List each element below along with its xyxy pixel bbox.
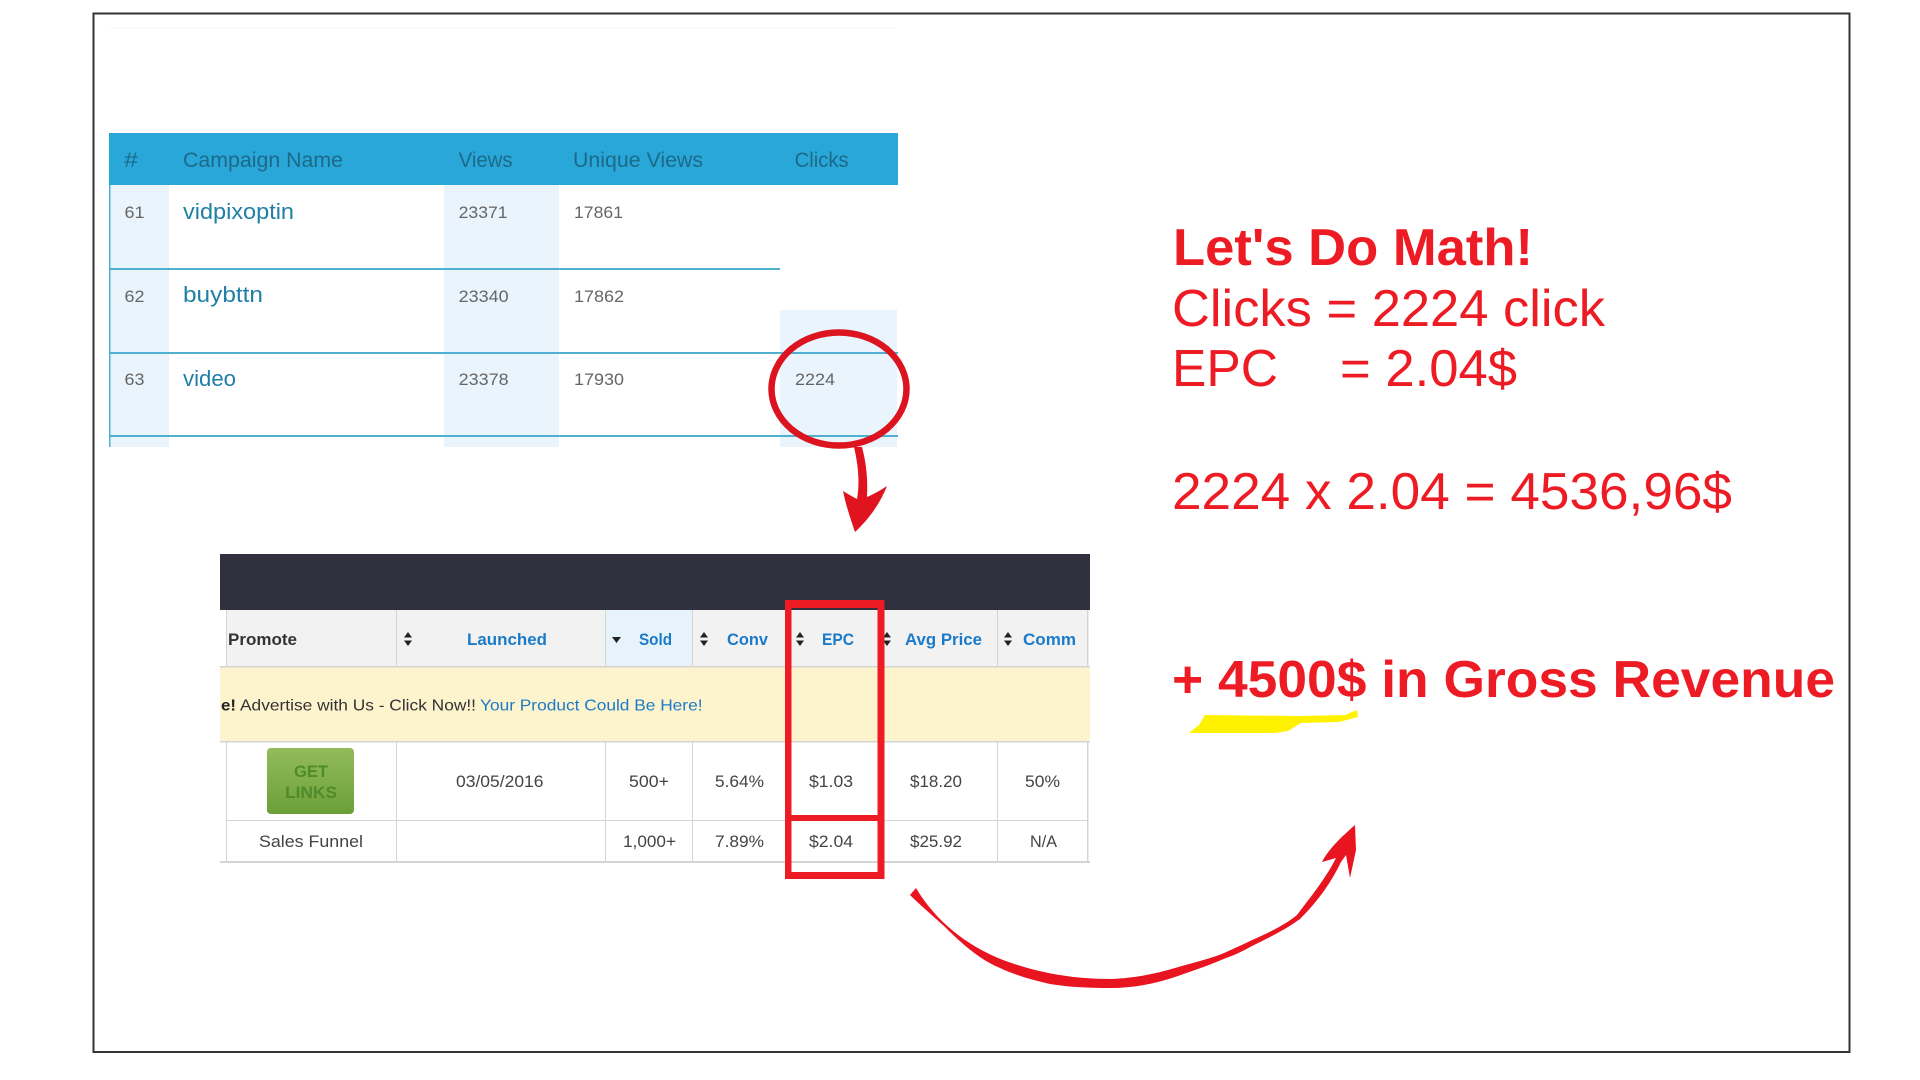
- red highlight box: EPC column: [785, 600, 884, 879]
- gross revenue callout: + 4500$ in Gross Revenue: [1172, 651, 1835, 709]
- product row 1: 50%: [1025, 773, 1060, 791]
- table row 62: buybttn: [183, 282, 263, 307]
- EPC line: = 2.04$: [1340, 340, 1517, 398]
- product table header row: Avg Price: [905, 631, 982, 649]
- table row 62: 17862: [574, 287, 624, 306]
- heading: Let's Do Math!: [1173, 219, 1533, 277]
- table row 61: 23371: [459, 203, 508, 222]
- get links button: [267, 748, 354, 814]
- product row 1: 500+: [629, 773, 669, 791]
- arrow: circle to EPC table: [843, 447, 887, 532]
- table row 63: 17930: [574, 370, 624, 389]
- advertising banner row: [220, 667, 1090, 741]
- advertising banner row: e!: [221, 698, 236, 715]
- table header row: Views: [459, 149, 513, 172]
- multiplication line: 2224 x 2.04 = 4536,96$: [1172, 463, 1732, 521]
- product row 1: 5.64%: [715, 773, 764, 791]
- product table header row: Promote: [228, 631, 297, 649]
- table header row: [109, 133, 898, 185]
- table header row: #: [124, 149, 138, 172]
- product table header row: Comm: [1023, 631, 1076, 649]
- product table header row: Conv: [727, 631, 769, 649]
- table header row: Campaign Name: [183, 149, 343, 172]
- table row 63: 63: [124, 370, 144, 389]
- dark title bar: [220, 554, 1090, 610]
- table row 61: vidpixoptin: [183, 199, 294, 224]
- table row 63: 2224: [795, 370, 835, 389]
- yellow highlight stroke: [1189, 710, 1358, 733]
- product table header row: [226, 610, 1087, 667]
- get links button: GET: [294, 762, 329, 781]
- product row 2: $2.04: [809, 833, 853, 851]
- table row 62: 62: [124, 287, 144, 306]
- product row 2: N/A: [1030, 833, 1057, 851]
- table row 61: 17861: [574, 203, 623, 222]
- table header row: Clicks: [795, 149, 849, 172]
- table row 63: video: [183, 366, 236, 391]
- table row 61: 61: [124, 203, 144, 222]
- panel: product table: [220, 554, 1090, 863]
- table row 61: [124, 199, 623, 224]
- table row 63: [124, 366, 835, 391]
- advertising banner row: Your Product Could Be Here!: [480, 698, 702, 715]
- clicks line: Clicks = 2224 click: [1172, 280, 1606, 338]
- product row 1: $18.20: [910, 773, 962, 791]
- table header row: Unique Views: [573, 149, 703, 172]
- curved arrow to gross revenue: [910, 825, 1356, 988]
- get links button: LINKS: [285, 783, 337, 802]
- sort icons: [404, 632, 1012, 646]
- table grid lines: [220, 610, 1090, 863]
- advertising banner row: Advertise with Us - Click Now!!: [240, 698, 476, 715]
- product row 1: [456, 773, 1060, 791]
- product table header row: EPC: [822, 631, 854, 649]
- math text block: [1172, 219, 1732, 521]
- table row 62: [124, 282, 624, 307]
- table row 63: 23378: [459, 370, 509, 389]
- EPC line: EPC: [1172, 340, 1278, 398]
- red circle around clicks value: [772, 332, 906, 446]
- product row 2: [259, 833, 1057, 851]
- panel: campaign table: [109, 133, 898, 447]
- product table header row: Launched: [467, 631, 547, 649]
- product row 2: $25.92: [910, 833, 962, 851]
- product row 1: $1.03: [809, 773, 853, 791]
- product row 2: 7.89%: [715, 833, 764, 851]
- table row 62: 23340: [459, 287, 509, 306]
- product row 2: 1,000+: [623, 833, 676, 851]
- product row 2: Sales Funnel: [259, 833, 363, 851]
- product row 1: 03/05/2016: [456, 773, 544, 791]
- shaded table columns: [109, 185, 897, 447]
- product table header row: Sold: [639, 631, 672, 649]
